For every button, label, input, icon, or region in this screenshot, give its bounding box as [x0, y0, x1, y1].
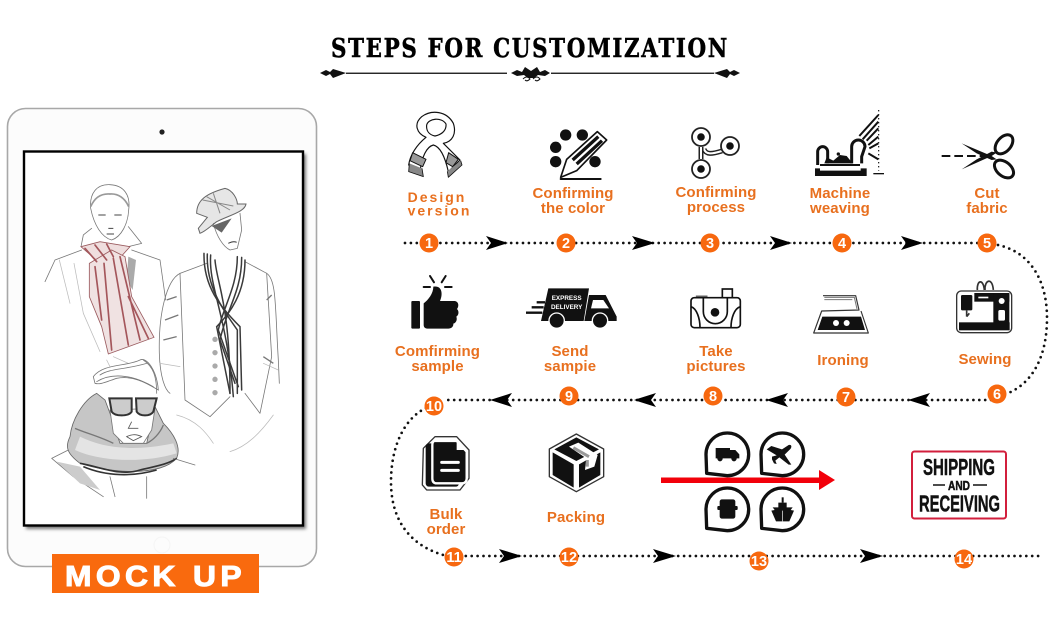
label: send sampie: sampie	[544, 358, 596, 375]
tablet mockup	[8, 108, 316, 566]
icon: weaving machine	[815, 110, 884, 176]
label: cut fabric: fabric	[966, 200, 1008, 217]
step number badges: 12	[561, 550, 577, 566]
label: confirming the color: the color	[541, 200, 605, 217]
step number badges: 6	[993, 387, 1001, 403]
sketch: man with hat and vest	[159, 188, 279, 452]
label: confirming process: Confirming	[676, 184, 756, 201]
tablet body	[8, 108, 316, 566]
fashion sketches	[45, 185, 279, 498]
label: packing: Packing	[547, 509, 605, 526]
step number badges: 2	[562, 236, 570, 252]
icon: process nodes	[692, 128, 739, 178]
label: cut fabric: Cut	[974, 185, 1000, 202]
home button	[154, 537, 170, 553]
icon: iron	[814, 296, 868, 333]
title ornament	[320, 67, 740, 81]
label: bulk order: order	[427, 521, 465, 538]
step number badges: 14	[956, 552, 972, 568]
icon: scarf	[409, 112, 462, 177]
red arrow	[661, 470, 835, 490]
step number badges: 5	[983, 236, 991, 252]
icon: color palette and pencil	[550, 129, 607, 179]
label: design version: Design	[408, 189, 466, 205]
step number badges: 9	[565, 389, 573, 405]
flow path: dotted route	[391, 243, 1047, 556]
label: confirming process: process	[687, 199, 745, 216]
icon group: transport modes	[706, 433, 804, 531]
shipping and receiving sign: SHIPPING	[923, 454, 995, 480]
icon: scissors	[942, 131, 1017, 181]
label: take pictures: Take	[699, 343, 733, 360]
icon: bus badge	[706, 488, 749, 531]
screen	[24, 152, 303, 526]
icon: sewing machine	[957, 281, 1012, 333]
flow arrows	[486, 236, 930, 563]
icon: ship badge	[761, 488, 804, 531]
step number badges: 1	[425, 236, 433, 252]
step number badges: 8	[709, 389, 717, 405]
step number badges: 7	[842, 390, 850, 406]
mock up banner	[52, 554, 259, 593]
screen shadow	[26, 154, 306, 529]
sketch: man with red scarf	[45, 185, 166, 367]
icon: package box	[549, 434, 604, 492]
icon: plane badge	[761, 433, 804, 476]
label: machine weaving: Machine	[810, 185, 870, 202]
camera	[159, 129, 165, 135]
icon: thumbs up	[411, 276, 458, 329]
icon: express delivery truck: DELIVERY	[551, 304, 583, 311]
step number badges: 13	[751, 554, 767, 570]
truck lettering: EXPRESS	[552, 295, 582, 302]
label: comfirming sample: sample	[411, 358, 464, 375]
icon: express delivery truck	[526, 288, 617, 328]
step number badges	[420, 234, 1006, 570]
shipping and receiving sign: RECEIVING	[919, 490, 1000, 516]
label: confirming the color: Confirming	[532, 185, 614, 202]
step number badges: 11	[446, 550, 462, 566]
icon: truck badge	[706, 433, 749, 476]
sketch: man with glasses and bulky scarf	[52, 359, 195, 498]
label: bulk order: Bulk	[430, 506, 463, 523]
label: ironing: Ironing	[817, 352, 869, 369]
title: STEPS FOR CUSTOMIZATION	[331, 34, 729, 64]
shipping and receiving sign: AND	[948, 478, 970, 493]
icon: documents	[422, 437, 469, 490]
label: sewing: Sewing	[958, 351, 1012, 368]
shipping and receiving sign	[912, 452, 1006, 518]
step number badges: 3	[706, 236, 714, 252]
mock up banner: MOCK UP	[65, 561, 246, 593]
label: design version: version	[408, 202, 471, 218]
label: take pictures: pictures	[686, 358, 746, 375]
step number badges: 10	[426, 399, 442, 415]
label: machine weaving: weaving	[809, 200, 870, 217]
label: comfirming sample: Comfirming	[395, 343, 480, 360]
icon: camera	[691, 289, 740, 328]
step number badges: 4	[838, 236, 846, 252]
label: send sampie: Send	[551, 343, 589, 360]
